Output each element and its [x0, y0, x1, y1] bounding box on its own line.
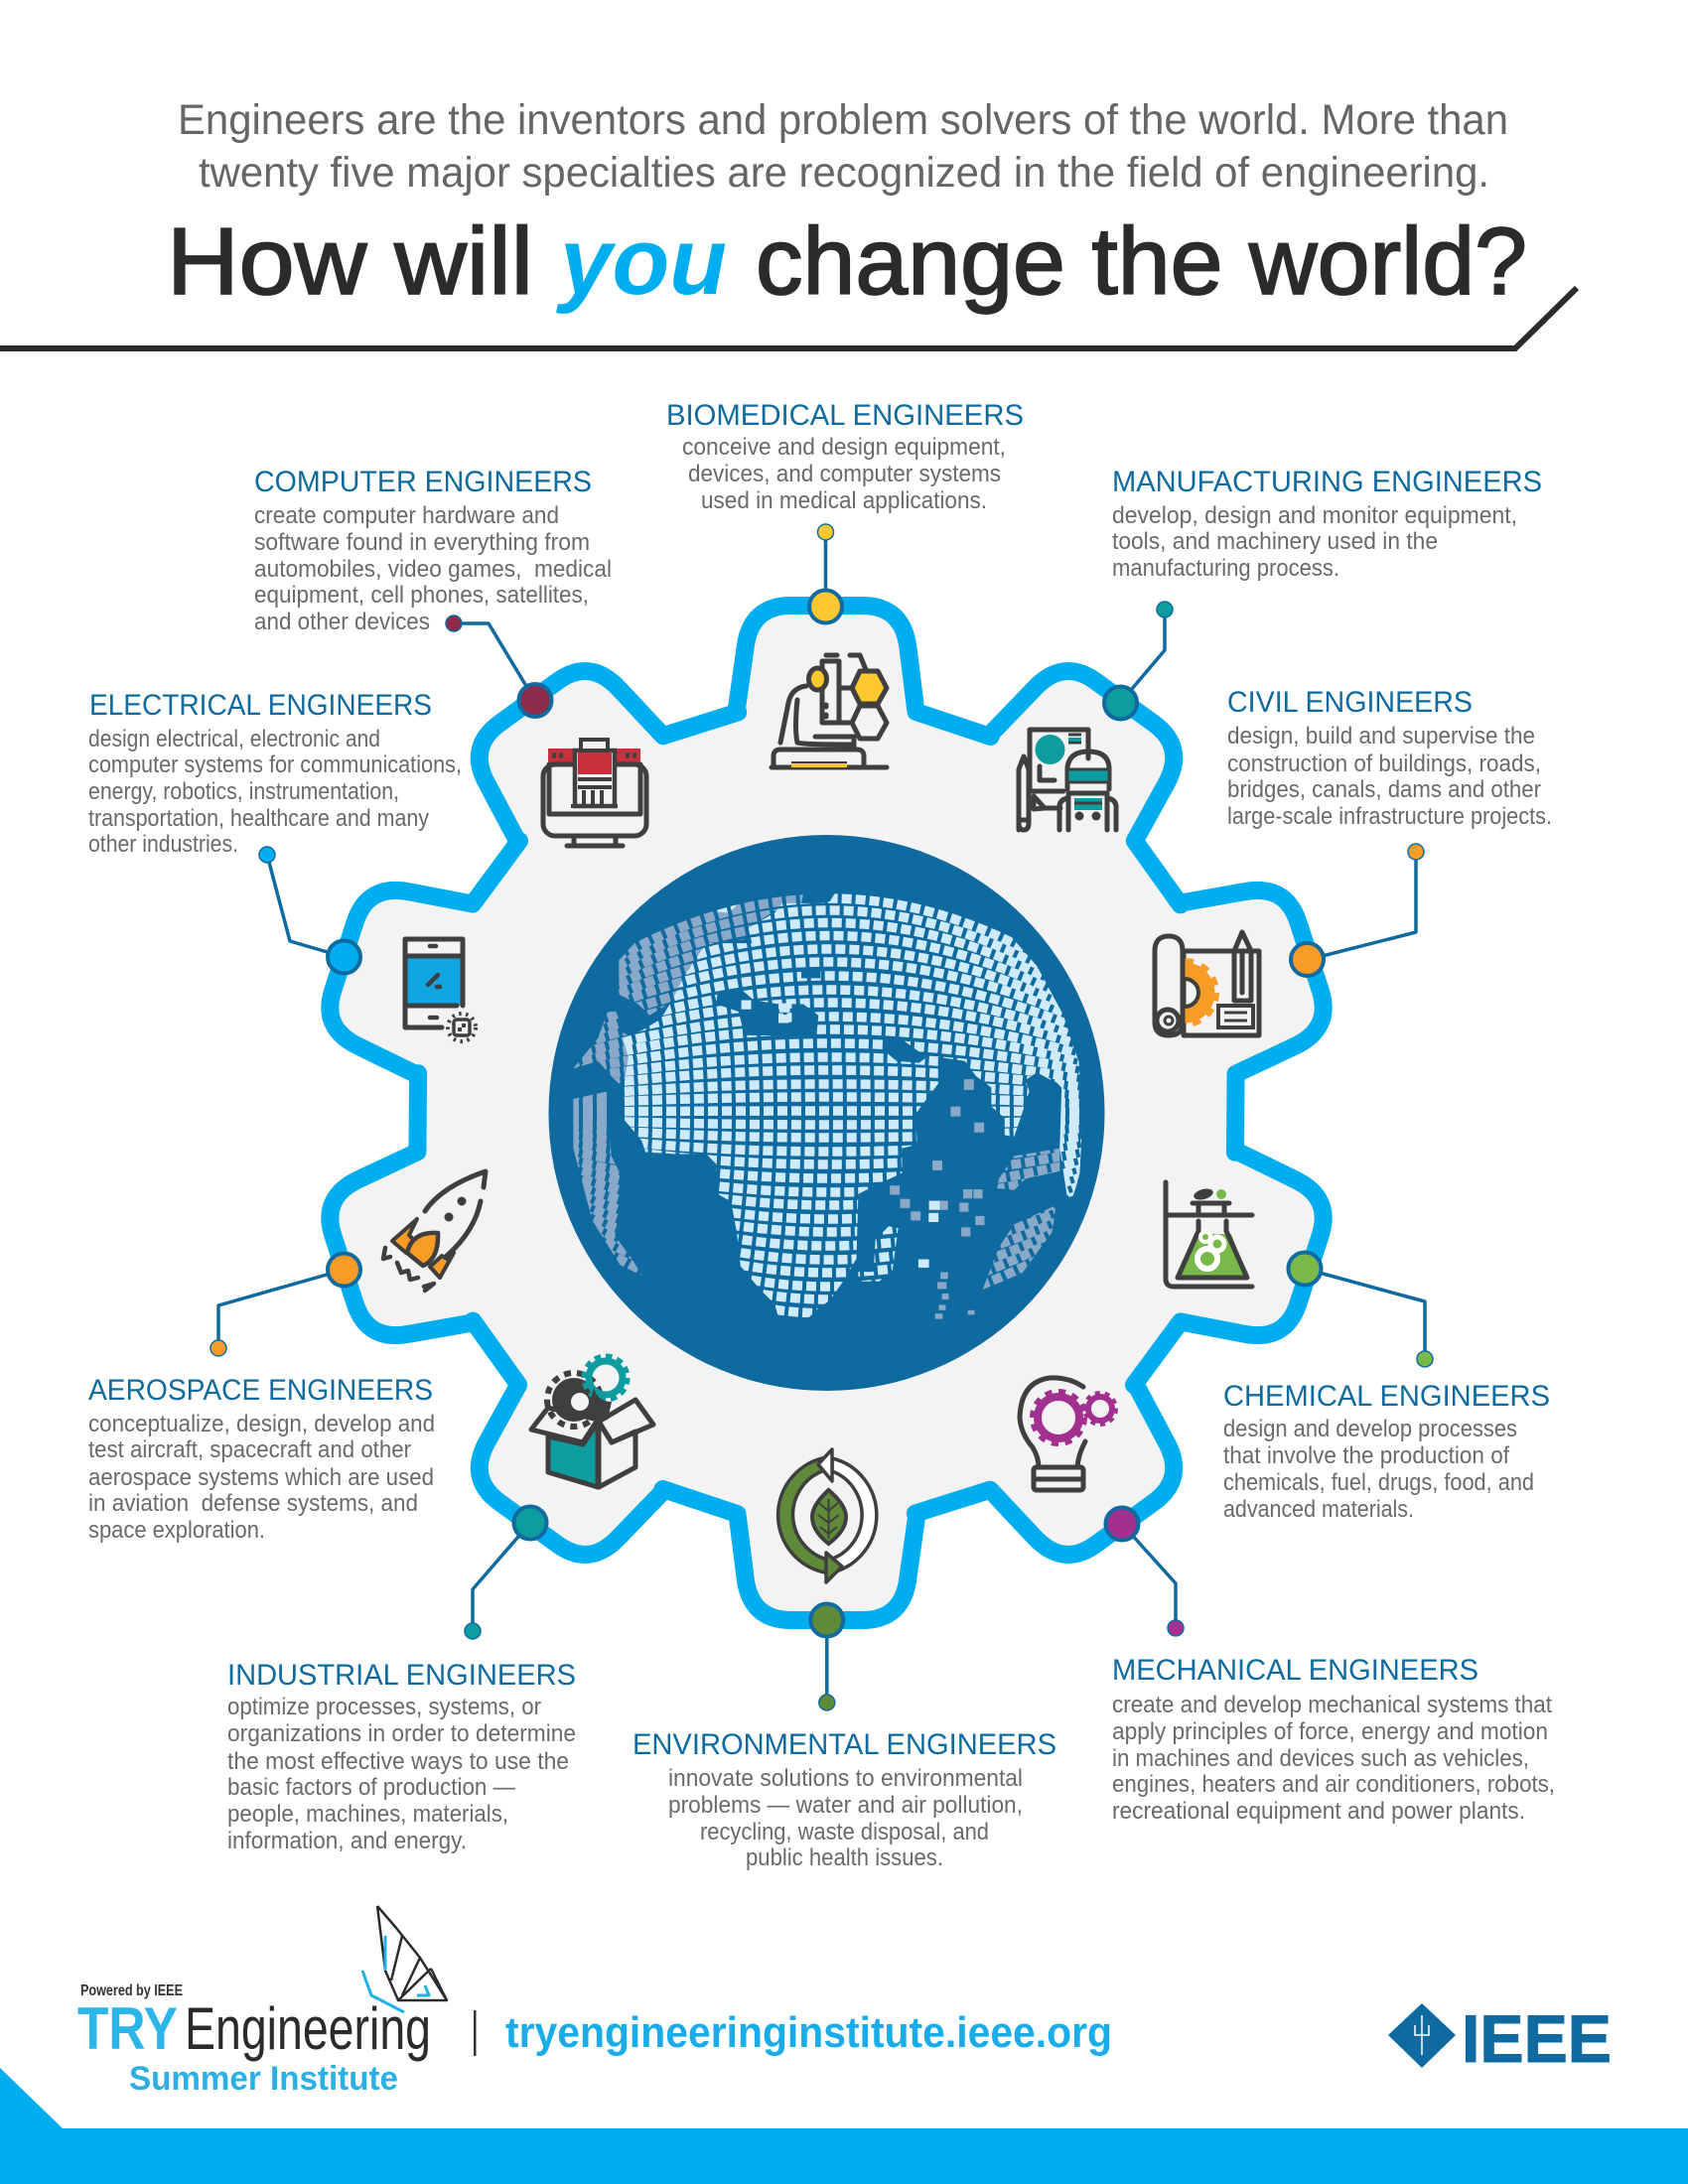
- text: electrical: energy, robotics, instrumentation,: [88, 778, 399, 805]
- text: environmental: recycling, waste disposal, and: [700, 1819, 989, 1845]
- text: computer: automobiles, video games, medical: [254, 556, 612, 583]
- leader: chemical: [1289, 1253, 1433, 1367]
- logo: TRYEngineering: Engineering: [185, 1995, 431, 2062]
- text: electrical: ELECTRICAL ENGINEERS: [89, 689, 432, 722]
- leader: environmental: [810, 1604, 843, 1710]
- leader: industrial: [465, 1507, 546, 1639]
- text: civil: CIVIL ENGINEERS: [1227, 686, 1473, 719]
- text: industrial: the most effective ways to use the: [227, 1748, 569, 1775]
- gear: [294, 606, 1359, 1620]
- text: industrial: optimize processes, systems, or: [227, 1694, 541, 1720]
- text: computer: equipment, cell phones, satellites,: [254, 582, 589, 609]
- leader: computer: [446, 615, 552, 717]
- text: aerospace: in aviation defense systems, and: [88, 1490, 418, 1517]
- text: mechanical: engines, heaters and air conditioners, robots,: [1112, 1771, 1555, 1798]
- text: civil: bridges, canals, dams and other: [1227, 776, 1541, 803]
- text: industrial: information, and energy.: [227, 1828, 467, 1854]
- text: aerospace: AEROSPACE ENGINEERS: [88, 1374, 433, 1407]
- logo: IEEE: [1388, 2001, 1612, 2077]
- text: aerospace: aerospace systems which are used: [88, 1464, 434, 1491]
- title: you: [556, 208, 727, 315]
- text: electrical: design electrical, electronic and: [88, 726, 380, 752]
- title: change the world?: [756, 208, 1527, 315]
- text: industrial: [227, 1659, 576, 1854]
- text: mechanical: apply principles of force, energy and motion: [1112, 1718, 1548, 1745]
- text: manufacturing: tools, and machinery used in the: [1112, 528, 1438, 555]
- text: mechanical: create and develop mechanical systems that: [1112, 1692, 1552, 1718]
- text: chemical: chemicals, fuel, drugs, food, and: [1223, 1469, 1534, 1496]
- text: chemical: design and develop processes: [1223, 1416, 1517, 1442]
- icon: lightbulb: [1020, 1378, 1116, 1490]
- leader: electrical: [259, 847, 360, 973]
- icon: recycle leaf: [778, 1449, 877, 1582]
- footer corner triangle: [0, 2068, 63, 2128]
- intro text: twenty five major specialties are recognized in the field of engineering.: [199, 149, 1489, 197]
- leader: mechanical: [1106, 1507, 1184, 1636]
- url: tryengineeringinstitute.ieee.org: [505, 2008, 1112, 2057]
- text: environmental: innovate solutions to environmental: [668, 1765, 1023, 1792]
- logo: butterfly: [362, 1906, 447, 2012]
- text: chemical: advanced materials.: [1223, 1496, 1414, 1523]
- leader: civil: [1291, 844, 1424, 976]
- title: [167, 208, 1527, 315]
- text: aerospace: [88, 1374, 435, 1544]
- text: manufacturing: manufacturing process.: [1112, 555, 1339, 582]
- text: environmental: public health issues.: [746, 1844, 943, 1871]
- text: industrial: INDUSTRIAL ENGINEERS: [227, 1659, 576, 1692]
- intro text: Engineers are the inventors and problem solvers of the world. More than: [178, 96, 1508, 144]
- text: electrical: [88, 689, 462, 858]
- icon: flask: [1166, 1182, 1252, 1287]
- logo: IEEE: IEEE: [1462, 2001, 1612, 2077]
- text: manufacturing: MANUFACTURING ENGINEERS: [1112, 466, 1542, 498]
- text: environmental: problems — water and air pollution,: [668, 1792, 1023, 1819]
- text: biomedical: BIOMEDICAL ENGINEERS: [666, 399, 1024, 432]
- text: computer: [254, 466, 612, 635]
- text: aerospace: conceptualize, design, develop and: [88, 1411, 435, 1437]
- text: electrical: other industries.: [88, 831, 238, 858]
- leader: manufacturing: [1104, 602, 1173, 719]
- icon: robot and board: [1019, 730, 1116, 830]
- text: computer: and other devices: [254, 609, 430, 635]
- footer bar: [0, 2128, 1688, 2184]
- text: mechanical: recreational equipment and power plants.: [1112, 1798, 1525, 1825]
- header rule: [0, 288, 1577, 348]
- text: electrical: transportation, healthcare and many: [88, 805, 429, 832]
- text: mechanical: MECHANICAL ENGINEERS: [1112, 1654, 1478, 1687]
- title: How will: [167, 208, 533, 315]
- text: biomedical: devices, and computer systems: [688, 461, 1001, 487]
- text: civil: large-scale infrastructure projects.: [1227, 803, 1552, 830]
- text: manufacturing: [1112, 466, 1542, 582]
- text: chemical: CHEMICAL ENGINEERS: [1223, 1380, 1550, 1413]
- globe: [548, 835, 1104, 1391]
- icon: phone: [405, 939, 476, 1041]
- text: computer: software found in everything from: [254, 529, 590, 556]
- text: industrial: people, machines, materials,: [227, 1801, 508, 1828]
- text: environmental: [633, 1728, 1056, 1871]
- text: industrial: organizations in order to determine: [227, 1720, 576, 1747]
- text: aerospace: test aircraft, spacecraft and other: [88, 1436, 411, 1463]
- text: environmental: ENVIRONMENTAL ENGINEERS: [633, 1728, 1056, 1761]
- text: civil: design, build and supervise the: [1227, 723, 1535, 750]
- intro text: [178, 96, 1508, 197]
- text: computer: create computer hardware and: [254, 502, 559, 529]
- text: chemical: [1223, 1380, 1550, 1523]
- leader: biomedical: [809, 524, 842, 623]
- leader: aerospace: [211, 1253, 360, 1356]
- text: biomedical: [666, 399, 1024, 514]
- icon: blueprint: [1153, 932, 1259, 1035]
- logo: TRYEngineering: [77, 1995, 431, 2062]
- text: mechanical: [1112, 1654, 1555, 1825]
- text: manufacturing: develop, design and monitor equipment,: [1112, 502, 1517, 529]
- text: mechanical: in machines and devices such as vehicles,: [1112, 1745, 1529, 1772]
- icon: microscope: [772, 655, 887, 767]
- text: electrical: computer systems for communications,: [88, 751, 462, 778]
- icon: box with gears: [531, 1356, 653, 1487]
- text: civil: construction of buildings, roads,: [1227, 751, 1541, 777]
- text: aerospace: space exploration.: [88, 1517, 265, 1544]
- text: civil: [1227, 686, 1552, 830]
- icon: computer building: [543, 740, 646, 846]
- logo: powered by: Powered by IEEE: [80, 1982, 183, 1999]
- logo: TRYEngineering: TRY: [77, 1995, 178, 2062]
- text: industrial: basic factors of production —: [227, 1774, 515, 1801]
- text: chemical: that involve the production of: [1223, 1442, 1509, 1469]
- text: biomedical: conceive and design equipment,: [682, 434, 1006, 461]
- text: biomedical: used in medical applications.: [701, 487, 987, 514]
- logo: summer institute: Summer Institute: [129, 2060, 398, 2098]
- text: computer: COMPUTER ENGINEERS: [254, 466, 592, 498]
- icon: rocket: [383, 1171, 486, 1291]
- divider: [474, 2010, 477, 2056]
